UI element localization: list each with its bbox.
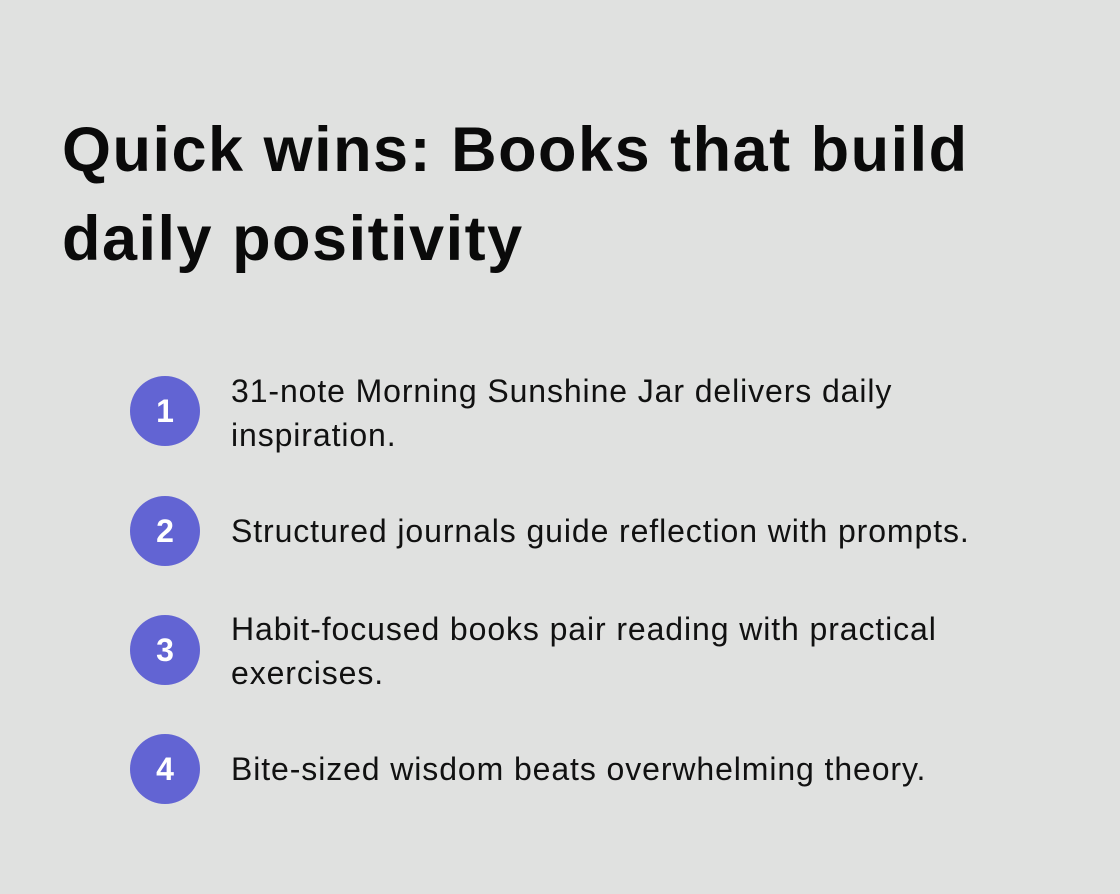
item 3 — [130, 611, 937, 691]
title — [62, 115, 969, 274]
icon: number 2 — [130, 496, 200, 566]
icon: number 3 — [130, 615, 200, 685]
title: daily positivity — [62, 204, 524, 274]
text 3 — [231, 611, 937, 691]
icon: number 1 — [130, 376, 200, 446]
icon: number 2: 2 — [156, 513, 174, 549]
text 3: exercises. — [231, 655, 384, 691]
icon: number 1: 1 — [156, 393, 174, 429]
item 2 — [130, 496, 970, 566]
icon: number 4: 4 — [156, 751, 174, 787]
text 1: 31-note Morning Sunshine Jar delivers daily — [231, 373, 892, 409]
text 1: inspiration. — [231, 417, 397, 453]
text 4: Bite-sized wisdom beats overwhelming theory. — [231, 751, 926, 787]
text 1 — [231, 373, 892, 453]
text 3: Habit-focused books pair reading with practical — [231, 611, 937, 647]
icon: number 3: 3 — [156, 632, 174, 668]
item 1 — [130, 373, 892, 453]
icon: number 4 — [130, 734, 200, 804]
title: Quick wins: Books that build — [62, 115, 969, 185]
text 2: Structured journals guide reflection with prompts. — [231, 513, 970, 549]
item 4 — [130, 734, 926, 804]
